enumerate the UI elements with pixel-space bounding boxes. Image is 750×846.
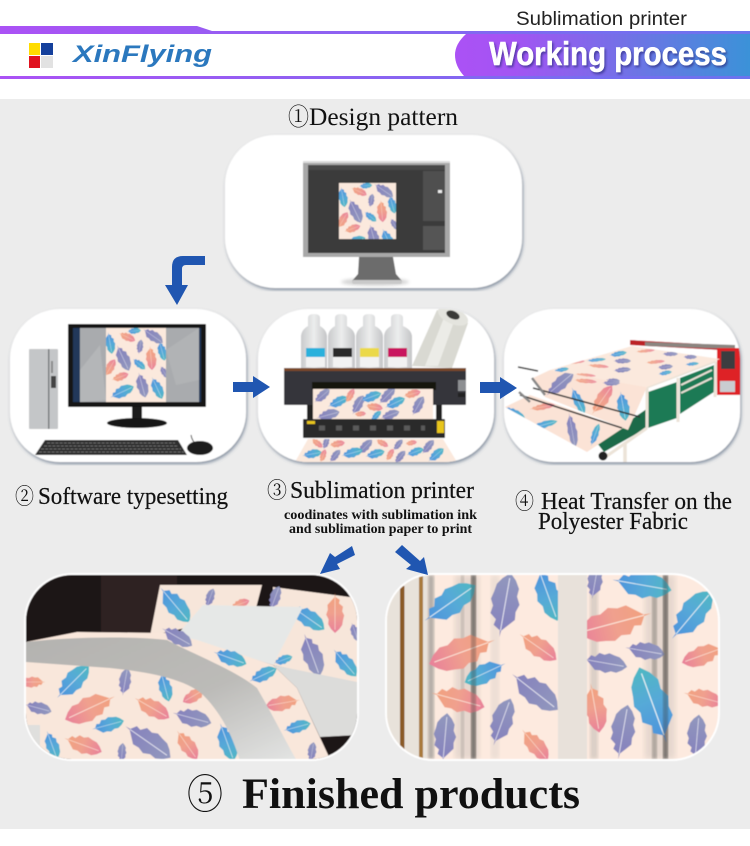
title: Working process: Working process — [489, 35, 727, 72]
arrow: to bedding — [320, 546, 355, 574]
step 1 heading: ① — [288, 104, 309, 131]
icon: red control box — [717, 348, 740, 395]
curtain feathers — [425, 574, 718, 760]
icon: machine frame — [597, 340, 735, 462]
panel: bedding product — [20, 573, 363, 768]
printed fabric upper — [312, 388, 434, 420]
wall and wood trim — [387, 575, 427, 759]
icon: printer lower bar — [303, 419, 445, 438]
icon: monitor stand — [341, 257, 409, 286]
step 3 description: coodinates with sublimation ink — [284, 508, 477, 523]
icon: monitor screen — [303, 161, 450, 257]
logo mark — [29, 43, 53, 68]
back pillows — [150, 581, 363, 684]
icon: mouse — [187, 435, 213, 455]
icon: paper roll — [412, 308, 468, 369]
fold overlay — [471, 575, 668, 759]
icon: tension rails — [518, 367, 640, 428]
arrow: to curtains — [395, 545, 428, 575]
panel: curtain product — [385, 563, 728, 766]
title pill — [455, 34, 750, 76]
curtain fold shadows — [428, 575, 675, 759]
white pillow — [177, 605, 303, 665]
step 4 label — [515, 489, 732, 535]
step 3 description — [284, 508, 477, 537]
header band — [0, 9, 750, 79]
step 5 heading: ⑤ — [187, 772, 223, 817]
icon: keyboard — [35, 440, 187, 455]
icon: desktop monitor — [68, 324, 206, 428]
arrow: step 2 to step 3 — [233, 376, 270, 398]
fitted sheet — [273, 665, 357, 737]
arrow: step 3 to step 4 — [480, 377, 517, 399]
fabric on table — [503, 346, 720, 452]
step 3 label: ③ — [267, 478, 287, 503]
step 4 label: ④ — [515, 489, 534, 514]
step 4 label: Heat Transfer on the — [541, 489, 732, 515]
step 1 heading: Design pattern — [309, 104, 459, 131]
subtitle: Sublimation printer: Sublimation printer — [516, 9, 688, 30]
panel: design pattern monitor — [225, 135, 522, 288]
icon: ink bottles — [301, 314, 412, 368]
step 3 label: Sublimation printer — [290, 478, 474, 504]
logo wordmark: XinFlying — [70, 41, 212, 68]
panel: heat transfer machine — [503, 309, 740, 462]
gap between curtains — [558, 575, 587, 759]
step 5 heading: Finished products — [242, 771, 580, 818]
printed fabric lower — [296, 438, 456, 463]
icon: pc tower — [29, 349, 58, 429]
grey comforter fold — [26, 638, 297, 761]
panel: software typesetting computer — [10, 309, 246, 462]
arrow: step 1 to step 2 — [165, 256, 205, 305]
step 3 description: and sublimation paper to print — [289, 522, 472, 537]
icon: printer body — [284, 368, 466, 421]
step 2 label: ② — [15, 484, 34, 509]
step 2 label: Software typesetting — [38, 484, 228, 510]
panel: sublimation printer — [258, 302, 494, 465]
step 4 label: Polyester Fabric — [538, 509, 688, 535]
comforter with feathers — [25, 627, 329, 760]
